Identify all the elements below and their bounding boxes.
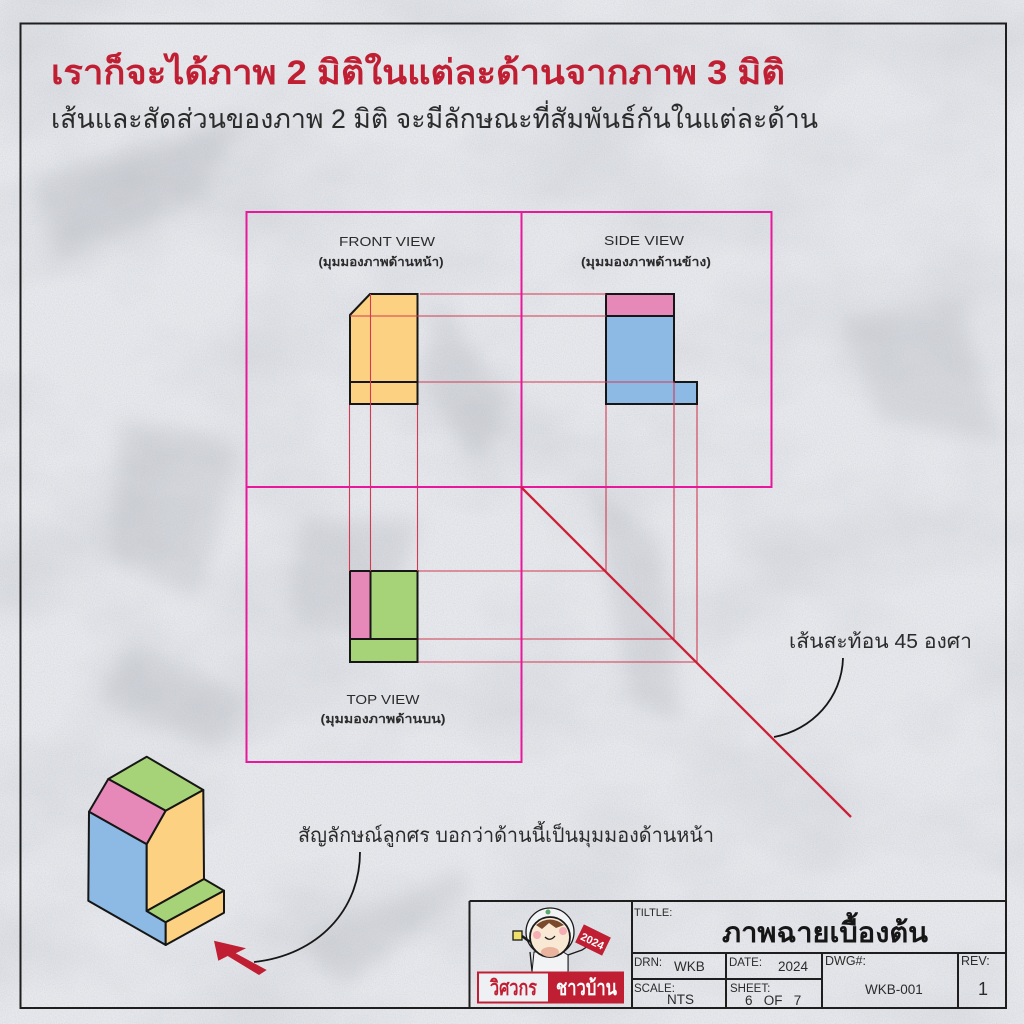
field: title: ภาพฉายเบื้องต้น — [722, 911, 928, 948]
frame: side view — [522, 212, 772, 487]
field: revision: REV: — [961, 954, 990, 968]
field: revision: 1 — [978, 979, 988, 999]
isometric 3D block — [88, 757, 224, 945]
field: revision — [961, 954, 990, 999]
field: scale — [634, 983, 694, 1007]
subtitle: เส้นและสัดส่วนของภาพ 2 มิติ จะมีลักษณะที่สัมพันธ์กันในแต่ละด้าน — [51, 100, 818, 134]
callout: arrow symbol — [254, 821, 714, 962]
icon: red arrow — [214, 941, 267, 975]
field: drawing number — [825, 954, 923, 997]
field: date — [729, 957, 809, 974]
face: step front — [166, 891, 224, 945]
logo — [478, 908, 624, 1004]
field: date: 2024 — [778, 959, 809, 974]
field: drawn by: WKB — [674, 959, 705, 974]
icon: 2024 sign — [575, 924, 611, 956]
face: side — [88, 812, 166, 945]
field: sheet — [730, 983, 801, 1008]
field: date: DATE: — [729, 957, 762, 969]
field: title — [634, 907, 928, 948]
face: front — [147, 790, 204, 911]
label: top view: (มุมมองภาพด้านบน) — [320, 712, 446, 727]
frame: top view — [246, 487, 522, 762]
field: drawing number: DWG#: — [825, 954, 866, 968]
field: drawing number: WKB-001 — [865, 982, 923, 997]
face: top — [108, 757, 203, 811]
panel: side view — [606, 294, 697, 404]
title block — [470, 901, 1006, 1008]
field: drawn by: DRN: — [634, 957, 662, 969]
callout: arrow symbol: สัญลักษณ์ลูกศร บอกว่าด้านนี้เป็นมุมมองด้านหน้า — [298, 821, 714, 848]
label: side view: (มุมมองภาพด้านข้าง) — [581, 255, 711, 270]
panel: top view — [350, 571, 418, 662]
field: sheet: 6 OF 7 — [745, 993, 801, 1008]
frame: front view — [246, 212, 522, 487]
logo badge: วิศวกร — [489, 977, 538, 1000]
field: drawn by — [634, 957, 705, 974]
title: เราก็จะได้ภาพ 2 มิติในแต่ละด้านจากภาพ 3 มิติ — [51, 51, 785, 92]
label: top view — [320, 693, 446, 727]
callout: 45 degree line — [774, 631, 972, 737]
field: sheet: SHEET: — [730, 983, 770, 995]
label: front view: FRONT VIEW — [339, 235, 435, 249]
title block grid — [470, 901, 1006, 1008]
face: step top — [147, 879, 224, 922]
orthographic projection diagram — [246, 212, 851, 817]
label: side view — [581, 234, 711, 270]
icon: engineer mascot — [513, 908, 588, 972]
face: sloped — [89, 779, 166, 844]
logo badge: ชาวบ้าน — [556, 976, 617, 1000]
logo badge — [478, 972, 624, 1004]
field: scale: SCALE: — [634, 983, 675, 995]
label: front view: (มุมมองภาพด้านหน้า) — [318, 255, 444, 270]
panel: front view — [350, 294, 418, 404]
projection lines — [350, 294, 697, 662]
field: scale: NTS — [667, 992, 694, 1007]
icon: 2024 sign: 2024 — [578, 931, 607, 953]
label: top view: TOP VIEW — [346, 693, 420, 707]
label: side view: SIDE VIEW — [604, 234, 684, 248]
label: front view — [318, 235, 444, 270]
45 degree reflection line — [521, 487, 851, 817]
field: title: TILTLE: — [634, 907, 672, 919]
callout: 45 degree line: เส้นสะท้อน 45 องศา — [789, 631, 972, 653]
